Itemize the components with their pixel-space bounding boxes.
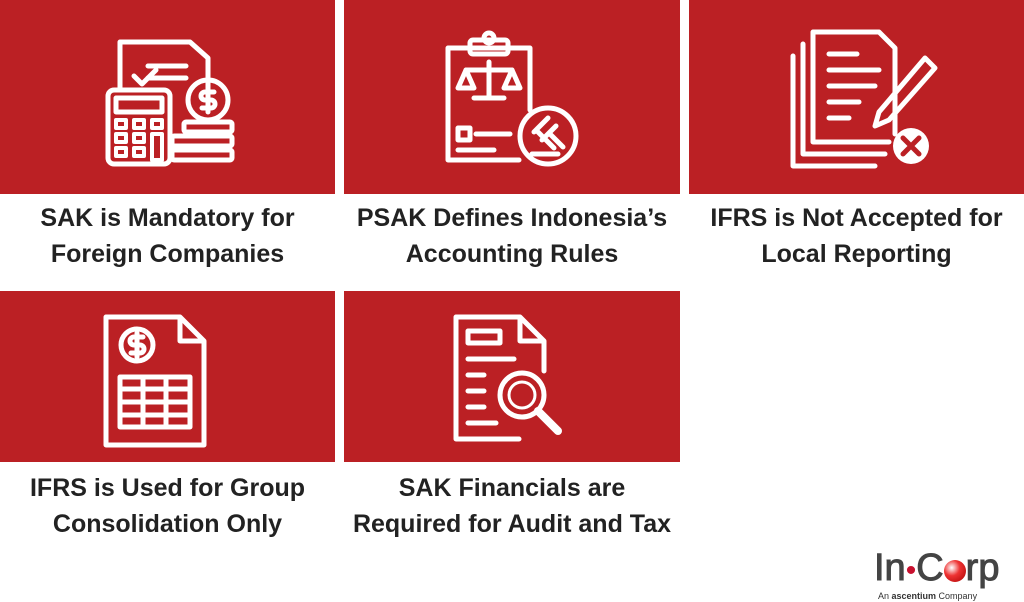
logo: InCorp: In•C rp [874,547,999,589]
heading: IFRS group consolidation: Consolidation Only [53,510,282,538]
panel: SAK audit and tax [344,291,680,462]
panel: IFRS group consolidation [0,291,335,462]
heading: SAK mandatory [40,204,295,268]
icon: documents with pen and x [790,30,938,168]
panel: IFRS not accepted [689,0,1024,194]
heading: SAK audit and tax [353,474,671,538]
heading: SAK audit and tax: Required for Audit and Tax [353,510,671,538]
icon: clipboard with scales and gavel [446,30,578,166]
heading: SAK mandatory: SAK is Mandatory for [40,204,295,232]
logo: InCorp: An ascentium Company [878,591,977,601]
heading: IFRS not accepted: Local Reporting [761,240,952,268]
heading: PSAK: Accounting Rules [406,240,618,268]
heading: IFRS not accepted: IFRS is Not Accepted for [710,204,1003,232]
icon: calculator and documents [106,40,234,166]
heading: SAK audit and tax: SAK Financials are [399,474,625,502]
heading: SAK mandatory: Foreign Companies [51,240,284,268]
heading: IFRS group consolidation: IFRS is Used for Group [30,474,305,502]
heading: PSAK [357,204,667,268]
panel: SAK mandatory [0,0,335,194]
heading: IFRS not accepted [710,204,1003,268]
icon: document with magnifier [454,314,562,442]
heading: IFRS group consolidation [30,474,305,538]
icon: document with dollar and table [104,314,206,448]
panel: PSAK [344,0,680,194]
heading: PSAK: PSAK Defines Indonesia’s [357,204,667,232]
